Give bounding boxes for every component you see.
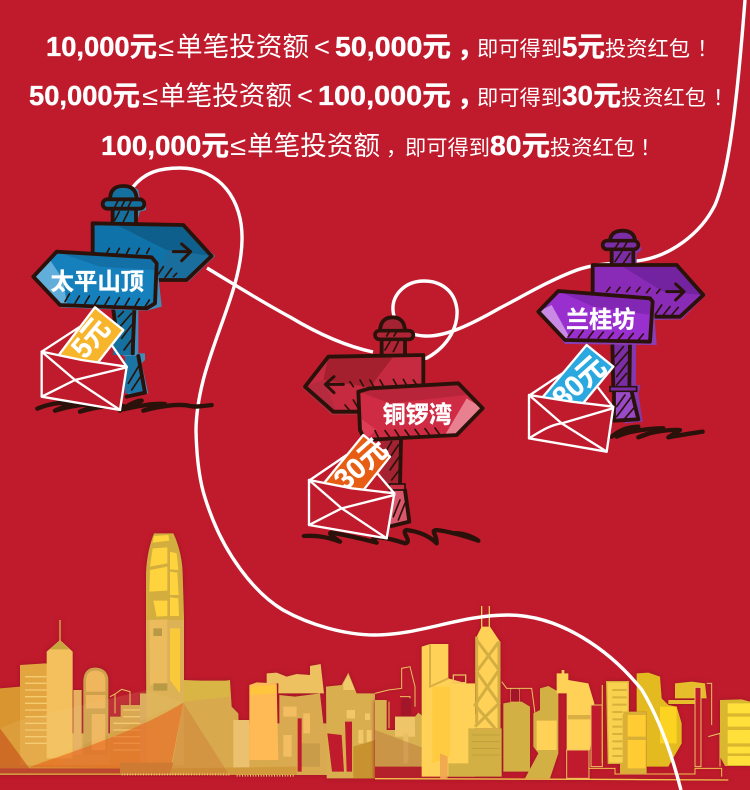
front sign: [358, 383, 483, 440]
route line: main curve: [133, 168, 681, 790]
title: reward tiers: [29, 31, 734, 161]
back sign: [302, 358, 420, 415]
text line: tier 2: [29, 80, 734, 111]
envelope with coupon: 30元: [328, 432, 394, 497]
text line: tier 3: 单笔投资额: [247, 131, 380, 161]
back sign: [593, 265, 706, 320]
text line: tier 1: 5元: [562, 31, 605, 62]
scribble shadow: [612, 427, 703, 437]
text line: tier 1: [46, 31, 718, 62]
envelope with coupon: 80元: [546, 350, 613, 415]
text line: tier 2: ！: [713, 87, 734, 110]
post: [603, 231, 643, 423]
text line: tier 2: 50,000元: [29, 80, 140, 111]
signpost 3: 兰桂坊: [529, 231, 706, 452]
envelope with coupon: [529, 345, 613, 452]
text line: tier 3: ！: [640, 137, 661, 160]
post: [103, 186, 148, 397]
text line: tier 1: ，: [457, 31, 484, 62]
envelope with coupon: [309, 432, 394, 538]
text line: tier 2: 投资红包: [621, 87, 706, 110]
text line: tier 1: 10,000元: [46, 31, 157, 62]
front sign: [37, 256, 162, 311]
skyline: left half: [0, 533, 375, 778]
text line: tier 1: 投资红包: [605, 38, 690, 61]
text line: tier 2: 即可得到: [477, 87, 562, 110]
label: 太平山顶: [51, 268, 144, 294]
text line: tier 2: 单笔投资额: [159, 81, 292, 111]
envelope with coupon: 5元: [65, 312, 117, 364]
text line: tier 3: ，: [386, 137, 407, 160]
label: 兰桂坊: [566, 306, 635, 332]
text line: tier 2: 30元: [562, 80, 621, 111]
scribble shadow: [37, 401, 212, 412]
signpost 1: 太平山顶: [33, 186, 215, 412]
text line: tier 1: ！: [697, 38, 718, 61]
envelope with coupon: [42, 307, 127, 410]
signpost 2: 铜锣湾: [302, 317, 483, 543]
skyline: right half: [375, 606, 750, 780]
text line: tier 1: 即可得到: [477, 38, 562, 61]
label: 铜锣湾: [383, 401, 452, 428]
text line: tier 3: 100,000元: [101, 130, 229, 161]
scribble shadow: [304, 530, 478, 543]
text line: tier 1: ≤: [158, 32, 174, 62]
text line: tier 2: <: [297, 81, 313, 111]
text line: tier 1: 50,000元: [335, 31, 451, 62]
text line: tier 1: 单笔投资额: [176, 32, 309, 62]
text line: tier 3: [101, 130, 661, 161]
text line: tier 3: 80元: [490, 130, 550, 161]
route line: loop curve: [207, 0, 745, 359]
text line: tier 1: <: [314, 32, 330, 62]
text line: tier 3: 投资红包: [550, 137, 635, 160]
text line: tier 3: 即可得到: [405, 137, 490, 160]
text line: tier 2: ≤: [142, 81, 158, 111]
post: [375, 317, 413, 527]
text line: tier 2: ，: [457, 80, 484, 111]
front sign: [542, 294, 657, 345]
text line: tier 2: 100,000元: [318, 80, 451, 111]
text line: tier 3: ≤: [230, 131, 246, 161]
back sign: [93, 225, 215, 282]
